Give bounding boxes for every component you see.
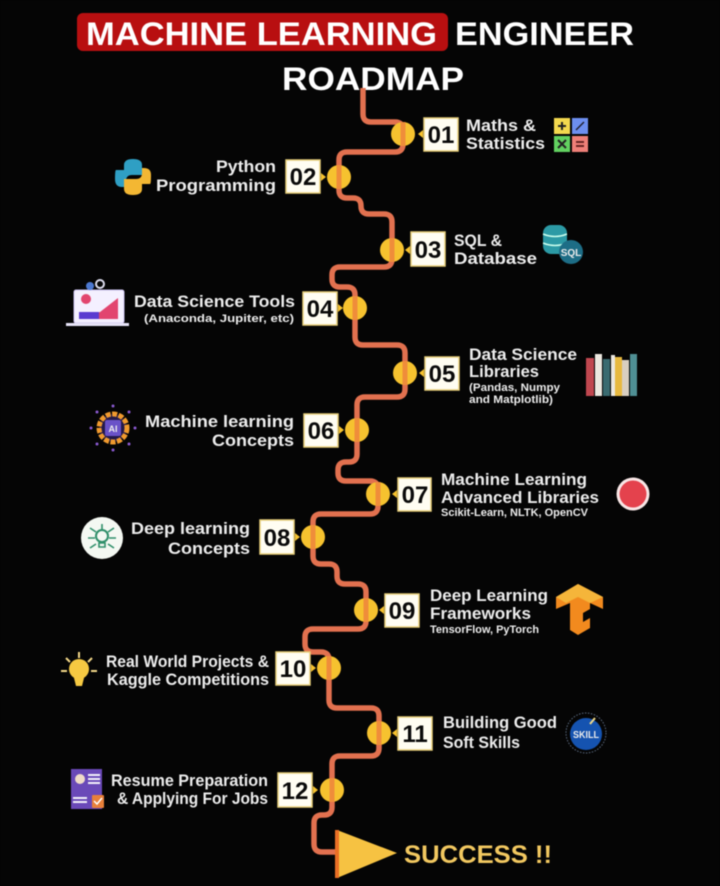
icon: sql database	[543, 225, 583, 264]
step 06: Machine learning	[145, 412, 294, 431]
step 02: Programming	[156, 176, 276, 195]
step 07: Scikit-Learn, NLTK, OpenCV	[441, 507, 589, 519]
step 12: & Applying For Jobs	[117, 789, 268, 808]
step 05: Data Science	[469, 345, 577, 364]
step 11: 11	[402, 721, 428, 748]
step 07: Advanced Libraries	[441, 488, 599, 507]
step 03	[380, 225, 583, 268]
step 09	[354, 584, 603, 636]
step 08: 08	[264, 525, 290, 552]
step 01: Statistics	[466, 134, 545, 153]
title	[77, 13, 634, 97]
step 10: Real World Projects &	[106, 652, 269, 671]
step 05	[393, 345, 637, 406]
icon: red badge	[616, 478, 650, 510]
step 01	[391, 116, 588, 153]
icon: resume	[71, 769, 104, 809]
icon: AI gear: AI	[108, 424, 118, 434]
step 07	[366, 470, 650, 519]
icon: AI gear	[90, 404, 136, 452]
step 12: 12	[282, 778, 308, 805]
step 08: Deep learning	[131, 519, 250, 538]
step 12: Resume Preparation	[111, 771, 268, 790]
step 10	[61, 652, 341, 689]
step 02: Python	[216, 157, 276, 176]
step 07: Machine Learning	[441, 470, 587, 489]
step 05: and Matplotlib)	[469, 394, 553, 406]
step 01: 01	[428, 122, 454, 149]
step 11: Soft Skills	[443, 733, 520, 752]
step 09: Frameworks	[430, 604, 531, 623]
step 03: SQL &	[454, 231, 502, 250]
step 05: (Pandas, Numpy	[469, 382, 561, 394]
step 01: Maths &	[466, 116, 536, 135]
step 03: 03	[415, 237, 441, 264]
icon: books	[586, 354, 637, 396]
icon: data tools dashboard	[66, 280, 129, 326]
step 08	[81, 517, 325, 559]
success label: SUCCESS !!	[404, 841, 552, 869]
title: MACHINE LEARNING	[86, 16, 437, 52]
step 04: (Anaconda, Jupiter, etc)	[144, 313, 294, 325]
title: ROADMAP	[282, 61, 464, 97]
step 08: Concepts	[168, 539, 250, 558]
step 09: TensorFlow, PyTorch	[430, 624, 539, 636]
icon: sql database: SQL	[561, 248, 581, 259]
success arrow	[335, 830, 397, 878]
roadmap path	[305, 88, 405, 852]
icon: tensorflow	[556, 584, 603, 635]
step 04: 04	[307, 296, 334, 323]
step 02: 02	[290, 164, 316, 191]
step 11: Building Good	[443, 713, 557, 732]
step 12	[71, 769, 344, 809]
step 10: 10	[280, 656, 306, 683]
icon: skill dial	[566, 713, 606, 753]
step 06: 06	[308, 418, 334, 445]
step 06	[90, 404, 369, 452]
step 02	[115, 157, 351, 195]
step 04	[66, 280, 367, 326]
icon: deep learning bulb	[81, 517, 123, 559]
title: ENGINEER	[455, 16, 634, 52]
step 09: 09	[389, 598, 415, 625]
step 06: Concepts	[212, 431, 294, 450]
step 09: Deep Learning	[430, 586, 548, 605]
icon: calculator keys	[554, 118, 588, 152]
step 05: Libraries	[469, 362, 539, 381]
step 03: Database	[454, 249, 537, 268]
icon: light bulb	[61, 652, 97, 686]
step 04: Data Science Tools	[134, 292, 295, 311]
icon: skill dial: SKILL	[573, 730, 599, 741]
step 07: 07	[402, 482, 428, 509]
step 05: 05	[429, 361, 455, 388]
icon: python	[115, 159, 151, 195]
step 11	[367, 713, 606, 753]
step 10: Kaggle Competitions	[107, 670, 269, 689]
